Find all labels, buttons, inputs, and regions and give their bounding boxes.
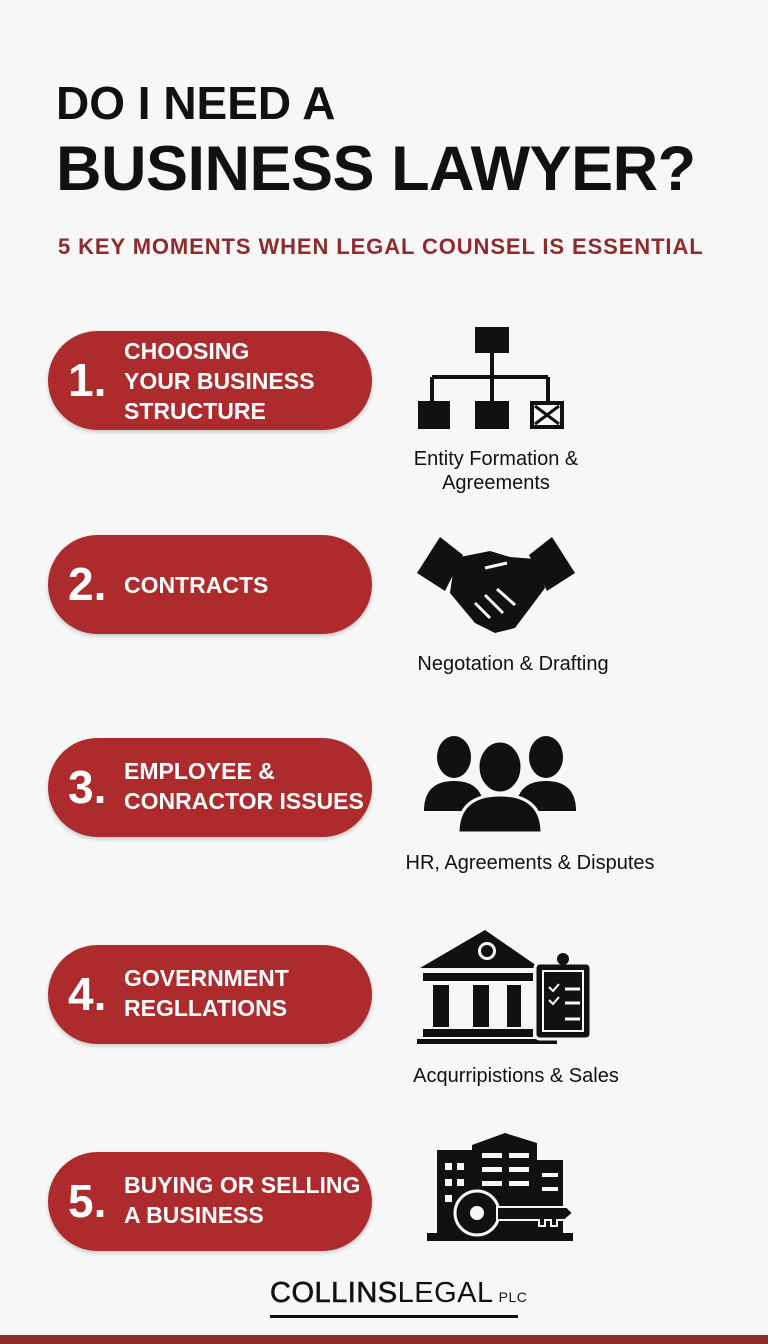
- title: DO I NEED A: [56, 77, 335, 129]
- icon: org chart: [418, 327, 564, 429]
- icon: courthouse and clipboard: [417, 930, 590, 1044]
- pill 3: [48, 738, 372, 837]
- pill 5: BUYING OR SELLING: [124, 1172, 360, 1198]
- pill 2: [48, 535, 372, 634]
- title: [56, 77, 696, 204]
- pill 1: [48, 331, 372, 430]
- pill 5: [48, 1152, 372, 1251]
- pill 2: 2.: [68, 558, 106, 610]
- pill 2: CONTRACTS: [124, 572, 268, 598]
- pill 1: YOUR BUSINESS: [124, 368, 314, 394]
- caption 3: HR, Agreements & Disputes: [406, 852, 654, 874]
- pill 1: CHOOSING: [124, 338, 249, 364]
- pill 5: 5.: [68, 1175, 106, 1227]
- pill 5: A BUSINESS: [124, 1202, 264, 1228]
- pill 4: 4.: [68, 968, 106, 1020]
- pill 4: GOVERNMENT: [124, 965, 289, 991]
- pill 4: [48, 945, 372, 1044]
- caption 2: Negotation & Drafting: [417, 653, 609, 675]
- footer logo: COLLINSLEGAL PLC: [270, 1277, 527, 1309]
- pill 4: REGLLATIONS: [124, 995, 287, 1021]
- caption 4: Acqurripistions & Sales: [413, 1065, 619, 1087]
- pill 3: CONRACTOR ISSUES: [124, 788, 364, 814]
- title: BUSINESS LAWYER?: [56, 134, 696, 204]
- icon: building with key: [427, 1133, 573, 1241]
- caption 1: Agreements: [442, 472, 550, 494]
- icon: handshake: [417, 537, 575, 633]
- subtitle: 5 KEY MOMENTS WHEN LEGAL COUNSEL IS ESSENTIAL: [58, 234, 704, 259]
- caption 1: [414, 448, 578, 494]
- bottom bar: [0, 1335, 768, 1344]
- icon: people: [424, 736, 576, 832]
- pill 3: 3.: [68, 761, 106, 813]
- pill 1: STRUCTURE: [124, 398, 266, 424]
- pill 3: EMPLOYEE &: [124, 758, 275, 784]
- pill 1: 1.: [68, 354, 106, 406]
- caption 1: Entity Formation &: [414, 448, 578, 470]
